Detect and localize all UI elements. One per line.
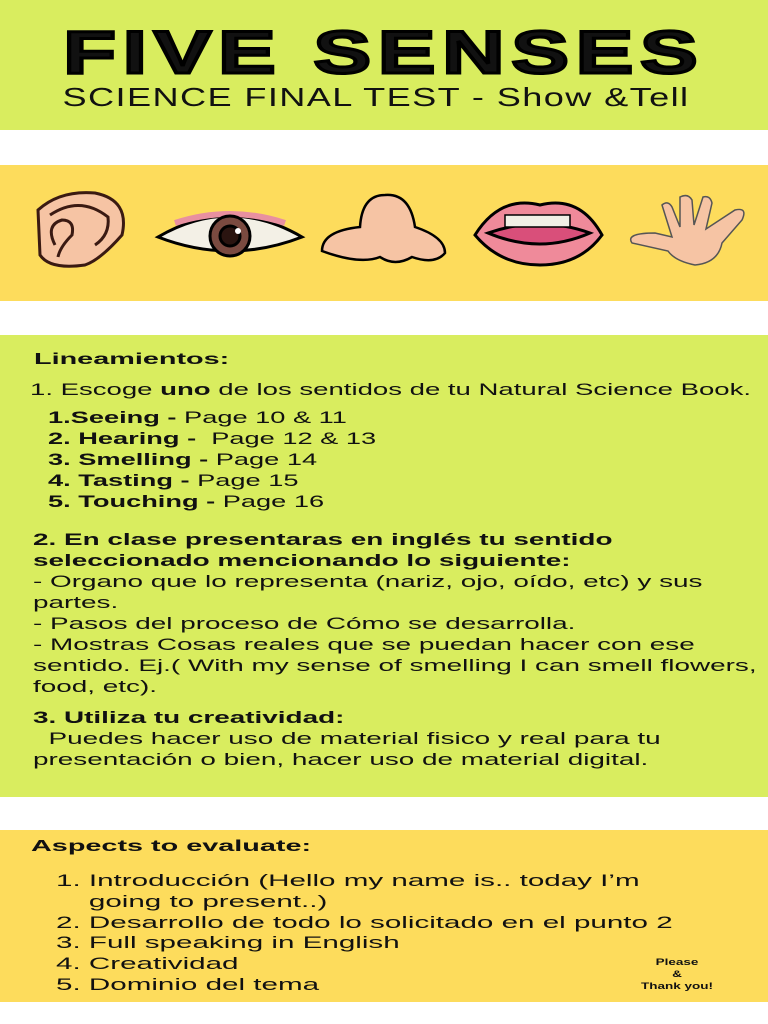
list: aspects: 1. Introducción (Hello my name is.. today I’m <box>56 871 640 890</box>
text: step 2: partes. <box>33 593 118 612</box>
text: step 2: sentido. Ej.( With my sense of smelling I can smell flowers, <box>33 656 757 675</box>
list: senses pages: 2. Hearing - Page 12 & 13 <box>48 429 376 448</box>
list: aspects: 3. Full speaking in English <box>56 933 400 952</box>
heading: aspects: Aspects to evaluate: <box>31 838 311 855</box>
text: step 3: 3. Utiliza tu creatividad: <box>33 708 344 727</box>
list: senses pages <box>48 408 376 511</box>
text: step 1: 1. Escoge uno de los sentidos de tu Natural Science Book. <box>30 380 751 399</box>
text: step 3 <box>33 708 661 769</box>
subtitle: SCIENCE FINAL TEST - Show &Tell <box>63 82 689 112</box>
callout: thank you: Thank you! <box>641 981 713 991</box>
list: senses pages: 3. Smelling - Page 14 <box>48 450 317 469</box>
heading: lineamientos: Lineamientos: <box>34 351 229 368</box>
header panel <box>0 0 768 130</box>
list: aspects: going to present..) <box>89 892 327 911</box>
panel: lineamientos <box>0 335 768 797</box>
text: step 2: 2. En clase presentaras en inglés tu sentido <box>33 530 613 549</box>
list: aspects <box>56 871 673 994</box>
icon: eye <box>158 214 302 256</box>
list: aspects: 2. Desarrollo de todo lo solicitado en el punto 2 <box>56 913 673 932</box>
text: step 2 <box>33 530 757 696</box>
list: senses pages: 5. Touching - Page 16 <box>48 492 324 511</box>
list: senses pages: 1.Seeing - Page 10 & 11 <box>48 408 347 427</box>
title: FIVE SENSES <box>63 19 705 86</box>
panel: aspects to evaluate <box>0 830 768 1002</box>
text: step 2: - Organo que lo representa (nariz, ojo, oído, etc) y sus <box>33 572 702 591</box>
icon: nose <box>322 195 445 262</box>
icon: hand <box>631 196 744 265</box>
list: aspects: 4. Creatividad <box>56 954 239 973</box>
callout: thank you: & <box>672 969 682 979</box>
callout: thank you <box>641 957 713 991</box>
panel: senses icons <box>0 165 768 301</box>
text: step 2: seleccionado mencionando lo siguiente: <box>33 551 571 570</box>
text: step 3: presentación o bien, hacer uso de material digital. <box>33 750 648 769</box>
text: step 2: - Mostras Cosas reales que se puedan hacer con ese <box>33 635 695 654</box>
list: aspects: 5. Dominio del tema <box>56 975 319 994</box>
icon: mouth <box>475 203 602 265</box>
icon: ear <box>38 193 123 266</box>
text: step 3: Puedes hacer uso de material fisico y real para tu <box>48 729 661 748</box>
callout: thank you: Please <box>656 957 698 967</box>
text: step 2: food, etc). <box>33 677 157 696</box>
list: senses pages: 4. Tasting - Page 15 <box>48 471 298 490</box>
text: step 2: - Pasos del proceso de Cómo se desarrolla. <box>33 614 575 633</box>
